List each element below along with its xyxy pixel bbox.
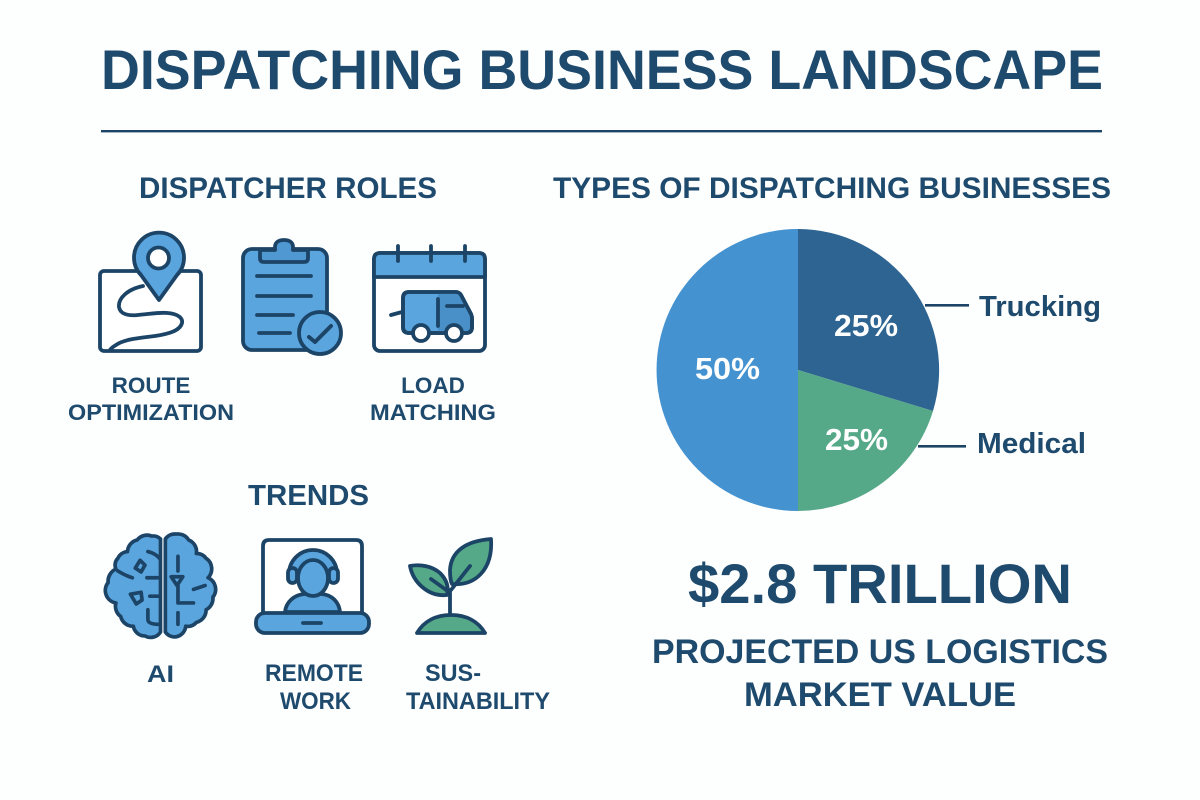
icon: laptop with remote worker — [256, 540, 369, 633]
label: route optimization — [68, 373, 234, 425]
title: DISPATCHING BUSINESS LANDSCAPE — [101, 38, 1103, 101]
value: medical 25%: 25% — [825, 422, 888, 457]
pie chart — [657, 229, 939, 511]
callout: trucking: Trucking — [979, 291, 1101, 323]
label: route optimization: OPTIMIZATION — [68, 400, 234, 425]
panel: trends — [105, 480, 550, 715]
icon: sprout — [410, 539, 491, 633]
label: AI: AI — [147, 661, 174, 688]
label: remote work: WORK — [280, 688, 352, 715]
heading: types of dispatching businesses: TYPES OF DISPATCHING BUSINESSES — [553, 172, 1111, 205]
label: load matching: LOAD — [401, 373, 465, 398]
label: route optimization: ROUTE — [112, 373, 190, 398]
value: trucking 25%: 25% — [834, 308, 898, 343]
label: remote work: REMOTE — [265, 660, 363, 687]
callout: medical: Medical — [977, 428, 1086, 460]
value: 50%: 50% — [695, 351, 760, 386]
caption: projected US logistics market value — [652, 633, 1108, 714]
icon: route map with pin — [100, 233, 201, 351]
statistic: $2.8 trillion: $2.8 TRILLION — [688, 552, 1072, 615]
caption: projected US logistics market value: PROJECTED US LOGISTICS — [652, 633, 1108, 671]
heading: dispatcher roles: DISPATCHER ROLES — [139, 172, 437, 205]
label: sustainability: SUS- — [425, 660, 481, 687]
caption: projected US logistics market value: MARKET VALUE — [744, 676, 1016, 714]
icon: clipboard with check — [243, 240, 341, 354]
icon: brain — [105, 534, 216, 637]
label: load matching: MATCHING — [370, 400, 496, 425]
panel: market value — [652, 552, 1108, 714]
panel: dispatcher roles — [68, 172, 496, 425]
label: sustainability — [406, 660, 550, 715]
label: load matching — [370, 373, 496, 425]
label: remote work — [265, 660, 363, 715]
panel: types of dispatching businesses — [553, 172, 1111, 511]
heading: trends: TRENDS — [248, 480, 369, 512]
label: sustainability: TAINABILITY — [406, 688, 550, 715]
icon: calendar with truck — [374, 246, 485, 351]
